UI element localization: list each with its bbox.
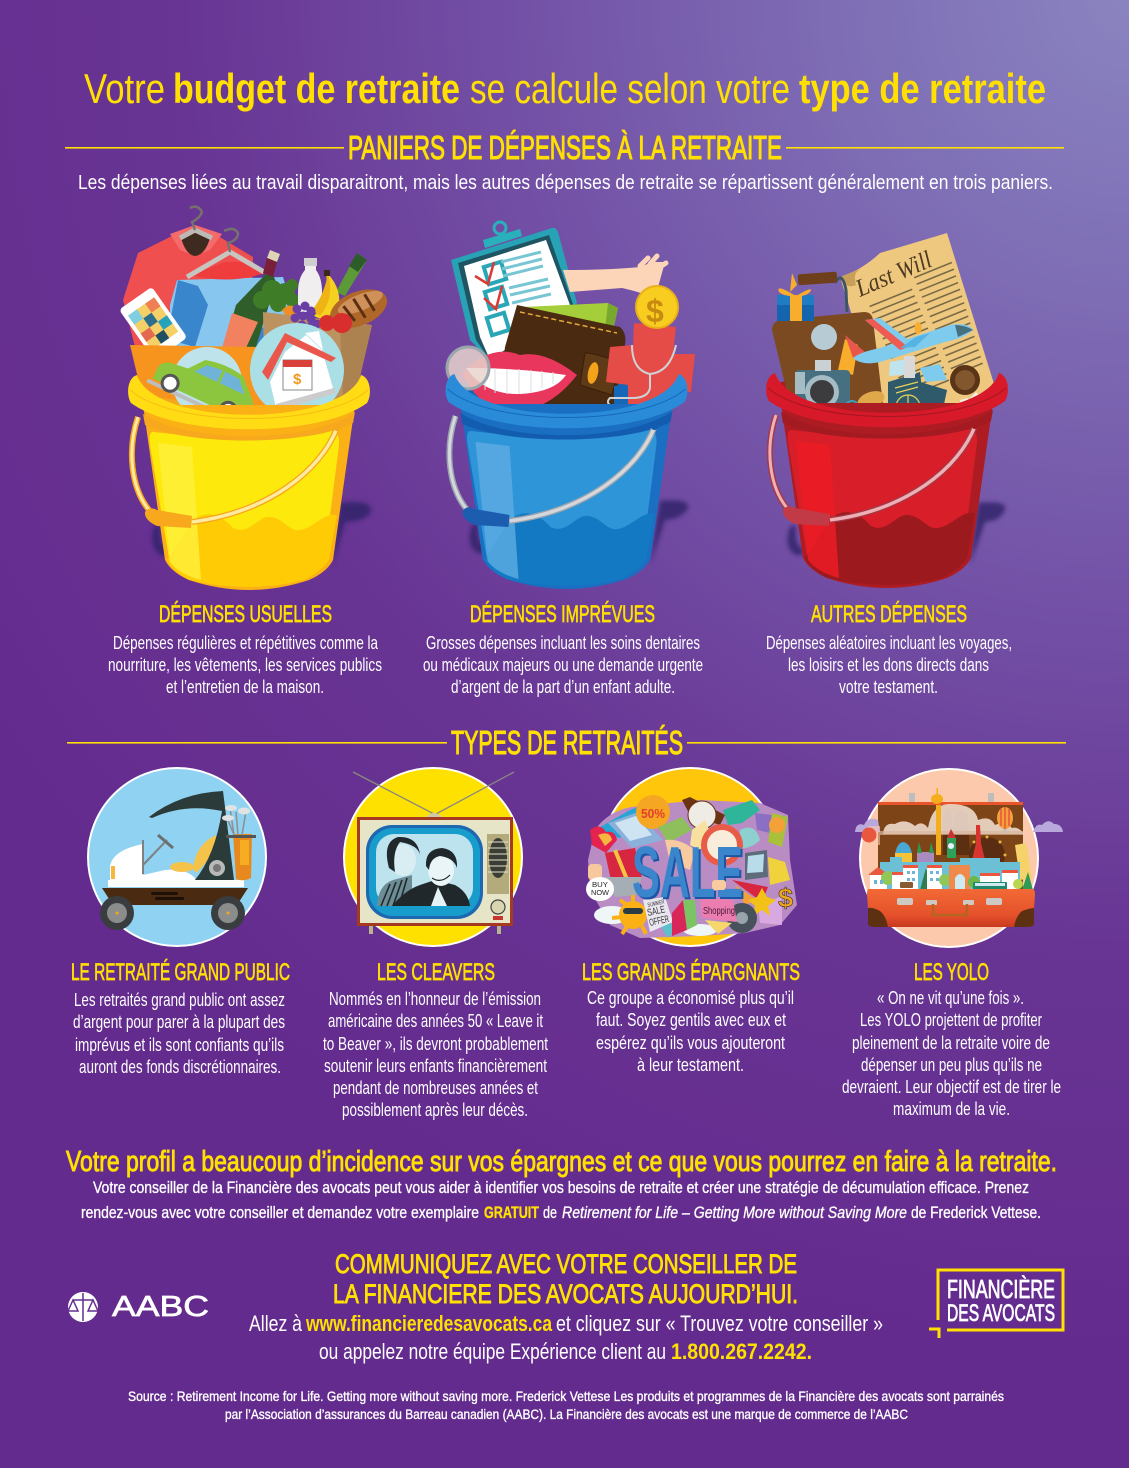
heading: paniers de dépenses: PANIERS DE DÉPENSES À LA RETRAITE (348, 129, 782, 166)
panel: le retraité grand public (71, 768, 290, 1077)
text: les grands épargnants (587, 988, 794, 1075)
icon: sale collage: BUY (592, 882, 608, 889)
call to action: Allez à (249, 1311, 303, 1336)
text block: advisor message: Retirement for Life – Getting More without Saving More (562, 1203, 907, 1222)
bucket back rim (448, 372, 684, 412)
text: les yolo: dépenser un peu plus qu’ils ne (861, 1055, 1042, 1075)
bucket contents: unexpected items (447, 222, 695, 412)
description: autres dépenses: Dépenses aléatoires incluant les voyages, (766, 633, 1012, 653)
text block: advisor message: GRATUIT (484, 1203, 539, 1222)
call to action: LA FINANCIERE DES AVOCATS AUJOURD’HUI. (333, 1279, 798, 1309)
description: dépenses usuelles (108, 633, 382, 697)
title: se calcule selon votre (470, 65, 790, 112)
text block: advisor message: de (543, 1203, 557, 1222)
logo: Financière des avocats: DES AVOCATS (947, 1300, 1055, 1327)
label: dépenses usuelles: DÉPENSES USUELLES (159, 601, 332, 628)
text: les cleavers: américaine des années 50 « Leave it (328, 1011, 543, 1031)
call to action: et cliquez sur « Trouvez votre conseiller » (556, 1311, 883, 1336)
text: les yolo: devraient. Leur objectif est de tirer le (842, 1077, 1061, 1097)
panel: les yolo (842, 769, 1063, 1119)
text: les yolo: maximum de la vie. (893, 1099, 1010, 1119)
panel: yellow bucket usual expenses (108, 207, 393, 697)
text: les yolo (842, 988, 1061, 1119)
icon: sale collage (586, 768, 797, 946)
icon: sale collage: SALE (634, 835, 745, 915)
panel: red bucket other expenses (766, 233, 1012, 697)
text: les cleavers: to Beaver », ils devront probablement (323, 1034, 548, 1054)
blue bucket body (446, 374, 687, 589)
bucket contents: everyday items (120, 205, 388, 405)
icon: golf cart (88, 768, 266, 946)
call to action: www.financieredesavocats.ca (305, 1311, 553, 1336)
source note: Source : Retirement Income for Life. Getting more without saving more. Frederick Vettese Les produits et programmes de la Financière des avocats sont parrainés (128, 1388, 1004, 1404)
description: dépenses usuelles: et l’entretien de la maison. (166, 677, 324, 697)
label: dépenses imprévues: DÉPENSES IMPRÉVUES (470, 601, 655, 628)
text: le retraité grand public: imprévus et ils sont confiants qu’ils (75, 1035, 284, 1055)
description: autres dépenses: les loisirs et les dons directs dans (788, 655, 989, 675)
text: les grands épargnants: faut. Soyez gentils avec eux et (596, 1010, 786, 1030)
text: les grands épargnants: Ce groupe a économisé plus qu’il (587, 988, 794, 1008)
icon: sale collage: NOW (591, 890, 609, 897)
bucket contents: everyday items: $ (293, 371, 302, 388)
source note (128, 1388, 1004, 1422)
text: les cleavers: possiblement après leur décès. (342, 1100, 528, 1120)
bucket contents: other items (772, 233, 994, 403)
title: budget de retraite (173, 65, 460, 112)
text: le retraité grand public: Les retraités grand public ont assez (74, 990, 285, 1010)
logo: Financière des avocats (929, 1270, 1063, 1338)
text: le retraité grand public: auront des fonds discrétionnaires. (79, 1057, 281, 1077)
bucket shadow (788, 502, 1005, 565)
icon: suitcase city (855, 769, 1063, 947)
text: les cleavers: Nommés en l’honneur de l’émission (329, 989, 541, 1009)
heading: les yolo: LES YOLO (914, 959, 989, 986)
description: dépenses imprévues: ou médicaux majeurs ou une demande urgente (423, 655, 703, 675)
description: dépenses usuelles: Dépenses régulières et répétitives comme la (113, 633, 379, 653)
logo: Financière des avocats: FINANCIÈRE (947, 1274, 1055, 1304)
bucket shadow (152, 502, 371, 568)
logo: AABC: AABC (112, 1291, 209, 1323)
text block: advisor message: de Frederick Vettese. (911, 1203, 1041, 1222)
icon: sale collage: $ (778, 883, 793, 913)
icon: sale collage: SALE (646, 904, 666, 919)
icon: sale collage: 50% (641, 806, 665, 821)
text: les cleavers: pendant de nombreuses années et (333, 1078, 538, 1098)
bucket back rim (769, 371, 1005, 411)
icon: sale collage: OFFER (648, 914, 670, 929)
icon: sale collage: SUMMER (647, 899, 665, 909)
text: les grands épargnants: à leur testament. (637, 1055, 744, 1075)
text block: advisor message (81, 1178, 1041, 1222)
text: le retraité grand public: d’argent pour parer à la plupart des (73, 1012, 285, 1032)
logo: AABC (68, 1291, 209, 1323)
source note: par l’Association d’assurances du Barreau canadien (AABC). La Financière des avocats est une marque de commerce de l’AABC (225, 1406, 908, 1422)
icon: retro television (344, 768, 522, 946)
icon: sale collage: Shopping (703, 906, 735, 917)
title: type de retraite (799, 65, 1046, 112)
description: dépenses imprévues: Grosses dépenses incluant les soins dentaires (426, 633, 700, 653)
text: le retraité grand public (73, 990, 285, 1077)
description: dépenses imprévues: d’argent de la part d’un enfant adulte. (451, 677, 675, 697)
red bucket body (766, 373, 1008, 588)
bucket back rim (131, 373, 367, 413)
text block: advisor message: rendez-vous avec votre conseiller et demandez votre exemplaire (81, 1203, 479, 1222)
heading: les cleavers: LES CLEAVERS (377, 959, 495, 986)
call to action: COMMUNIQUEZ AVEC VOTRE CONSEILLER DE (335, 1249, 797, 1279)
title: Votre (84, 65, 165, 112)
icon: sale collage: SALE (632, 833, 743, 913)
text: les yolo: pleinement de la retraite voire de (852, 1033, 1050, 1053)
text: les yolo: « On ne vit qu’une fois ». (877, 988, 1024, 1008)
heading: les grands épargnants: LES GRANDS ÉPARGNANTS (582, 959, 800, 986)
text: les yolo: Les YOLO projettent de profiter (860, 1010, 1042, 1030)
heading: le retraité grand public: LE RETRAITÉ GRAND PUBLIC (71, 959, 290, 986)
panel: blue bucket unexpected expenses (423, 222, 703, 697)
heading: types de retraités: TYPES DE RETRAITÉS (451, 724, 683, 761)
panel: les grands épargnants (582, 768, 800, 1075)
text: les grands épargnants: espérez qu’ils vous ajouteront (596, 1033, 785, 1053)
label: autres dépenses: AUTRES DÉPENSES (811, 601, 967, 628)
description: autres dépenses: votre testament. (839, 677, 938, 697)
title (84, 65, 1046, 112)
bucket contents: other items: Last Will (851, 246, 936, 303)
description: dépenses imprévues (423, 633, 703, 697)
bucket shadow (470, 500, 688, 565)
panel: les cleavers (323, 768, 548, 1120)
call to action (249, 1249, 883, 1364)
yellow bucket body (128, 375, 370, 590)
text: les cleavers: soutenir leurs enfants financièrement (324, 1056, 547, 1076)
call to action: 1.800.267.2242. (671, 1339, 812, 1364)
bucket contents: unexpected items: $ (646, 293, 664, 329)
description: autres dépenses (766, 633, 1012, 697)
description: dépenses usuelles: nourriture, les vêtements, les services publics (108, 655, 382, 675)
text: les cleavers (323, 989, 548, 1120)
call to action: ou appelez notre équipe Expérience client au (319, 1339, 666, 1364)
